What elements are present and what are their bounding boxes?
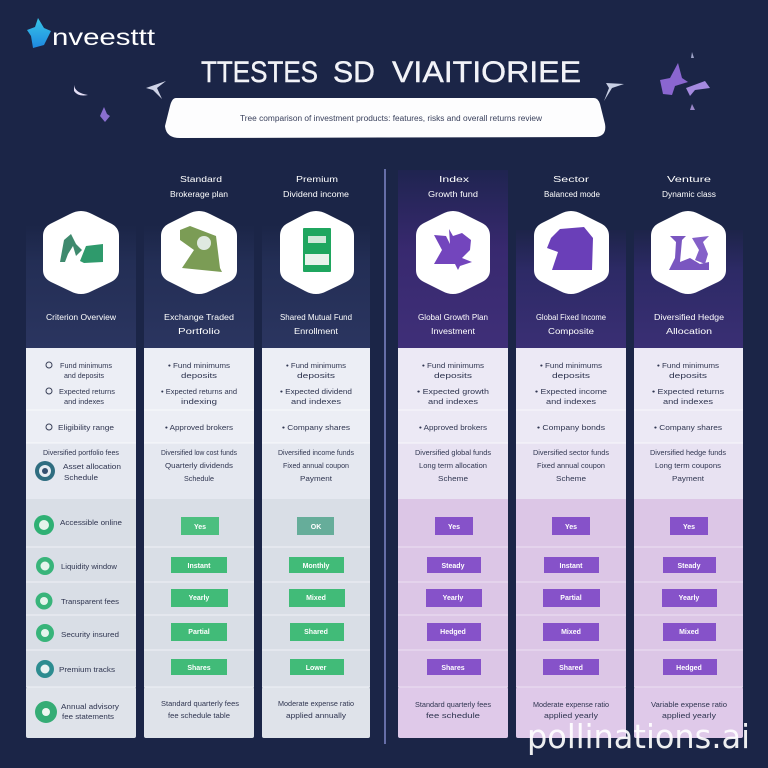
icon: logo gem xyxy=(27,18,51,48)
title: VIAITIORIEE xyxy=(392,56,581,89)
feature text rows: Eligibility range xyxy=(58,423,114,432)
closing note: applied yearly xyxy=(662,711,716,720)
feature text rows xyxy=(650,361,726,483)
icon: green dot xyxy=(36,557,54,575)
feature text rows: Diversified low cost funds xyxy=(161,448,237,457)
column label xyxy=(280,313,352,336)
subtitle banner xyxy=(165,98,605,138)
feature text rows xyxy=(43,361,121,482)
feature text rows xyxy=(161,361,237,483)
feature text rows: Diversified hedge funds xyxy=(650,448,726,457)
value badge: Partial xyxy=(560,595,582,602)
value badge xyxy=(543,589,600,607)
feature text rows: Payment xyxy=(300,474,333,483)
closing note: Standard quarterly fees xyxy=(415,700,491,709)
value badge: Mixed xyxy=(561,629,581,636)
value badge: Steady xyxy=(678,563,701,570)
feature text rows: Long term allocation xyxy=(419,461,487,470)
yes badge: Yes xyxy=(448,524,460,531)
feature text rows: deposits xyxy=(297,371,335,380)
column label: Exchange Traded xyxy=(164,313,234,322)
value badge: Monthly xyxy=(303,563,330,570)
value badge xyxy=(171,589,228,607)
yes badge xyxy=(552,517,590,535)
icon: green dot xyxy=(36,592,52,610)
feature text rows: Fixed annual coupon xyxy=(537,461,605,470)
closing note: applied yearly xyxy=(544,711,598,720)
closing note: fee schedule xyxy=(426,711,480,720)
light table body xyxy=(516,348,626,738)
decorative sparkles left xyxy=(74,81,166,122)
feature text rows: Scheme xyxy=(556,474,586,483)
closing note xyxy=(161,699,239,720)
feature text rows: • Expected returns xyxy=(652,387,724,396)
feature text rows: Expected returns xyxy=(59,387,115,396)
icon: hexagon badge xyxy=(416,211,490,294)
value badge xyxy=(544,557,599,573)
logo: nveesttt xyxy=(52,24,156,50)
feature text rows: and indexes xyxy=(428,397,478,406)
feature text rows: deposits xyxy=(552,371,590,380)
icon: hexagon badge xyxy=(280,211,354,294)
panel: column 1 features: fee statements xyxy=(62,712,114,721)
yes badge: Yes xyxy=(194,524,206,531)
feature text rows: and deposits xyxy=(64,371,104,380)
value badge xyxy=(663,557,716,573)
decorative sparkles right xyxy=(604,52,710,110)
value badge: Hedged xyxy=(440,629,466,636)
value badge xyxy=(171,659,227,675)
feature text rows: deposits xyxy=(434,371,472,380)
column label: Investment xyxy=(431,327,476,336)
closing note xyxy=(415,700,491,720)
column label xyxy=(418,313,488,336)
row label: Security insured xyxy=(61,630,119,639)
watermark: pollinations.ai xyxy=(527,717,750,756)
feature text rows: Long term coupons xyxy=(655,461,721,470)
icon: hexagon badge xyxy=(43,211,119,294)
column heading xyxy=(283,175,350,199)
yes badge: Yes xyxy=(565,524,577,531)
icon: hexagon badge xyxy=(161,211,237,294)
value badge: Shared xyxy=(559,665,583,672)
panel: green column 3 xyxy=(262,175,370,738)
row label: Liquidity window xyxy=(61,562,118,571)
closing note: Standard quarterly fees xyxy=(161,699,239,708)
value badge xyxy=(290,659,344,675)
feature text rows: Schedule xyxy=(184,474,214,483)
value badge: Lower xyxy=(306,665,327,672)
value badge: Instant xyxy=(560,563,583,570)
feature text rows: • Expected income xyxy=(535,387,607,396)
yes badge xyxy=(181,517,219,535)
light table body xyxy=(262,348,370,738)
feature text rows: Diversified global funds xyxy=(415,448,491,457)
icon: hexagon badge xyxy=(651,211,726,294)
value badge xyxy=(427,623,481,641)
column label: Portfolio xyxy=(178,327,221,336)
feature text rows: • Expected returns and xyxy=(161,387,237,396)
feature text rows: • Company shares xyxy=(282,423,350,432)
icon: shield badge xyxy=(35,461,55,481)
column heading: Balanced mode xyxy=(544,190,601,199)
closing note xyxy=(278,699,354,720)
value badge xyxy=(662,589,717,607)
column label: Allocation xyxy=(666,327,712,336)
column label xyxy=(164,313,234,336)
feature text rows: Diversified portfolio fees xyxy=(43,448,119,457)
centre divider xyxy=(384,169,386,744)
feature text rows: • Approved brokers xyxy=(419,423,487,432)
column label: Shared Mutual Fund xyxy=(280,313,352,322)
value badge: Steady xyxy=(442,563,465,570)
feature text rows: Diversified sector funds xyxy=(533,448,609,457)
column label: Composite xyxy=(548,327,595,336)
title xyxy=(201,56,581,89)
feature text rows: • Fund minimums xyxy=(422,361,484,370)
column heading: Index xyxy=(439,175,469,184)
title: SD xyxy=(333,56,375,89)
value badge: Yearly xyxy=(189,595,209,602)
feature text rows: and indexes xyxy=(64,397,104,406)
feature text rows: and indexes xyxy=(663,397,713,406)
feature text rows: deposits xyxy=(669,371,707,380)
row label: Accessible online xyxy=(60,518,122,527)
value badge: Mixed xyxy=(679,629,699,636)
column heading: Dividend income xyxy=(283,190,350,199)
column heading xyxy=(662,175,716,199)
value badge xyxy=(663,623,716,641)
feature text rows: • Fund minimums xyxy=(168,361,230,370)
column label: Criterion Overview xyxy=(46,313,116,322)
title: TTESTES xyxy=(201,56,318,89)
value badge xyxy=(427,659,481,675)
panel: column 1 features xyxy=(26,211,136,738)
feature text rows: and indexes xyxy=(291,397,341,406)
value badge xyxy=(427,557,481,573)
panel: purple column 6 xyxy=(634,175,743,738)
feature text rows: • Expected dividend xyxy=(280,387,352,396)
feature text rows xyxy=(533,361,609,483)
panel: purple column 4 xyxy=(398,170,508,738)
feature text rows: • Fund minimums xyxy=(540,361,602,370)
column heading xyxy=(428,175,478,199)
value badge xyxy=(289,557,344,573)
feature text rows: • Company shares xyxy=(654,423,722,432)
panel: purple column 5 xyxy=(516,175,626,738)
value badge xyxy=(171,623,227,641)
column heading: Growth fund xyxy=(428,190,478,199)
closing note: Moderate expense ratio xyxy=(533,700,609,709)
value badge: Shares xyxy=(441,665,465,672)
light table body xyxy=(26,348,136,738)
light table body xyxy=(144,348,254,738)
column heading: Dynamic class xyxy=(662,190,716,199)
closing note: Variable expense ratio xyxy=(651,700,727,709)
value badge: Yearly xyxy=(679,595,699,602)
feature text rows: • Fund minimums xyxy=(286,361,346,370)
column label: Global Growth Plan xyxy=(418,313,488,322)
value badge: Mixed xyxy=(306,595,326,602)
feature text rows: Payment xyxy=(672,474,705,483)
value badge xyxy=(290,623,344,641)
value badge: Instant xyxy=(188,563,211,570)
feature text rows: Asset allocation xyxy=(63,462,121,471)
panel: green column 2 xyxy=(144,175,254,738)
closing note xyxy=(651,700,727,720)
closing note xyxy=(533,700,609,720)
feature text rows: Schedule xyxy=(64,473,98,482)
column heading xyxy=(170,175,228,199)
feature text rows: indexing xyxy=(181,397,217,406)
value badge xyxy=(663,659,717,675)
feature text rows: • Expected growth xyxy=(417,387,489,396)
feature text rows: and indexes xyxy=(546,397,596,406)
closing note: Moderate expense ratio xyxy=(278,699,354,708)
column heading: Sector xyxy=(553,175,590,184)
row label: Annual advisory xyxy=(61,702,119,711)
feature text rows: Quarterly dividends xyxy=(165,461,233,470)
column label: Enrollment xyxy=(294,327,339,336)
value badge: Yearly xyxy=(443,595,463,602)
column label: Global Fixed Income xyxy=(536,313,607,322)
column label xyxy=(536,313,607,336)
yes badge xyxy=(435,517,473,535)
column label xyxy=(654,313,725,336)
yes badge: Yes xyxy=(683,524,695,531)
row label: Transparent fees xyxy=(61,597,119,606)
value badge xyxy=(289,589,345,607)
icon: green dot xyxy=(34,515,54,535)
logo xyxy=(27,18,156,50)
value badge xyxy=(543,623,599,641)
feature text rows: • Company bonds xyxy=(537,423,605,432)
yes badge xyxy=(670,517,708,535)
closing note: applied annually xyxy=(286,711,346,720)
column heading xyxy=(544,175,601,199)
column heading: Standard xyxy=(180,175,222,184)
value badge xyxy=(543,659,599,675)
yes badge: OK xyxy=(311,524,321,531)
feature text rows xyxy=(415,361,491,483)
feature text rows: Fund minimums xyxy=(60,361,112,370)
value badge xyxy=(171,557,227,573)
closing note: fee schedule table xyxy=(168,711,230,720)
light table body xyxy=(398,348,508,738)
column heading: Venture xyxy=(667,175,712,184)
feature text rows: • Fund minimums xyxy=(657,361,719,370)
feature text rows xyxy=(278,361,354,483)
light table body xyxy=(634,348,743,738)
feature text rows: Fixed annual coupon xyxy=(283,461,349,470)
value badge: Hedged xyxy=(676,665,702,672)
icon: blue-green dot xyxy=(36,660,54,678)
value badge xyxy=(426,589,482,607)
value badge: Shares xyxy=(187,665,211,672)
column label: Diversified Hedge xyxy=(654,313,725,322)
icon: target dot xyxy=(35,701,57,723)
column header background xyxy=(26,225,136,348)
icon: green dot xyxy=(36,624,54,642)
yes badge xyxy=(297,517,334,535)
row label: Premium tracks xyxy=(59,665,115,674)
value badge: Shared xyxy=(304,629,328,636)
feature text rows: • Approved brokers xyxy=(165,423,233,432)
feature text rows: Scheme xyxy=(438,474,468,483)
column heading: Premium xyxy=(296,175,338,184)
icon: hexagon badge xyxy=(534,211,609,294)
column heading: Brokerage plan xyxy=(170,190,228,199)
feature text rows: deposits xyxy=(181,371,217,380)
value badge: Partial xyxy=(188,629,210,636)
subtitle banner: Tree comparison of investment products: features, risks and overall returns review xyxy=(240,114,542,123)
feature text rows: Diversified income funds xyxy=(278,448,354,457)
